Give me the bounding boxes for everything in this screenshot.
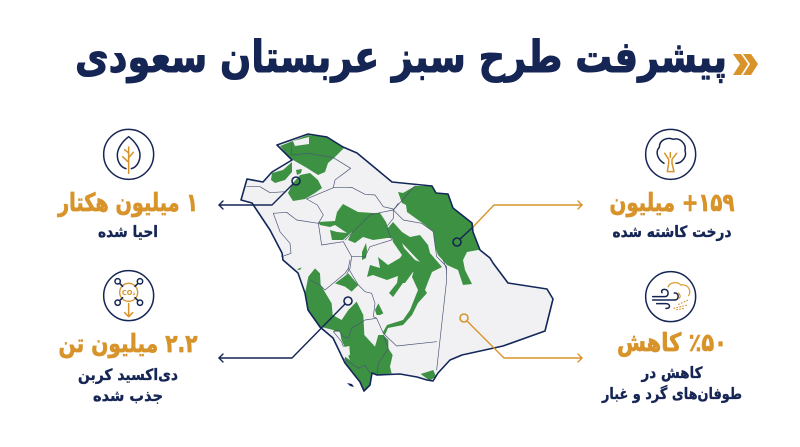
description: احیا شده <box>98 223 158 241</box>
map of Saudi Arabia <box>241 134 553 391</box>
leader: top right <box>453 201 582 246</box>
green areas <box>271 135 480 391</box>
icon: wind and dust <box>646 272 696 322</box>
stat: ٪۵۰ کاهش <box>617 328 727 357</box>
description: درخت کاشته شده <box>612 223 732 241</box>
icon: leaf <box>104 129 154 179</box>
leader: bottom right <box>460 314 582 362</box>
icon: tree <box>646 129 696 179</box>
island <box>347 383 354 387</box>
district boundaries <box>247 142 447 373</box>
panel: carbon absorbed <box>58 271 197 405</box>
description line 2: جذب شده <box>93 387 163 405</box>
panel: dust storm reduction <box>601 272 742 403</box>
leader: top left <box>219 177 300 209</box>
panel: trees planted <box>610 129 734 241</box>
description line 2: طوفان‌های گرد و غبار <box>601 384 742 403</box>
description line 1: کاهش در <box>641 364 703 382</box>
stat: ۱۵۹+ میلیون <box>610 188 734 218</box>
icon: title chevrons <box>733 54 758 75</box>
map border stroke <box>241 134 553 391</box>
panel: hectares revived <box>56 129 198 241</box>
leader: bottom left <box>219 297 352 362</box>
map outline land <box>241 134 553 391</box>
icon: CO2 molecule: CO₂ <box>122 289 135 297</box>
description line 1: دی‌اکسید کربن <box>78 366 178 384</box>
stat: ۲.۲ میلیون تن <box>58 329 197 359</box>
stat: ۱ میلیون هکتار <box>56 188 198 218</box>
